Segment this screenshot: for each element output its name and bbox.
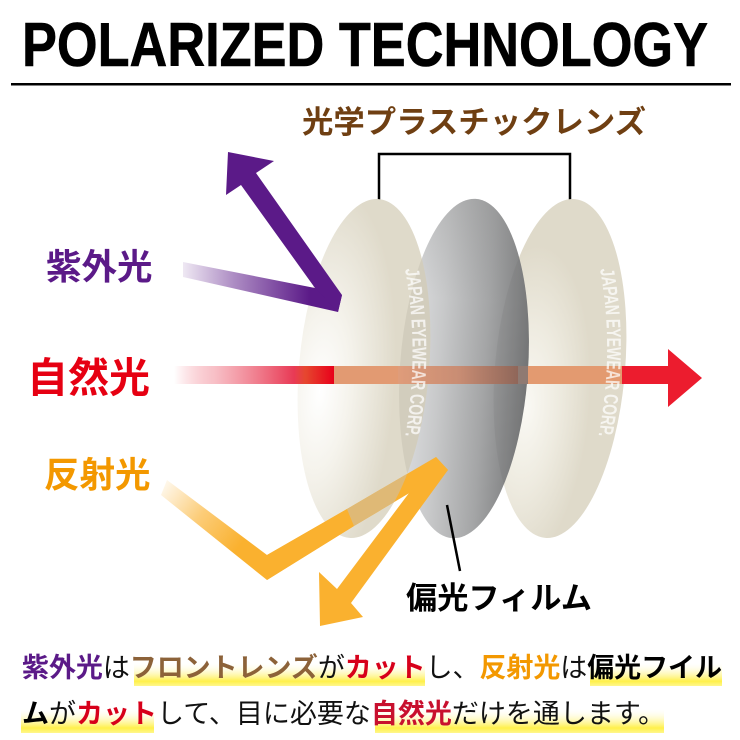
lens stack <box>298 198 626 538</box>
highlights <box>21 662 722 733</box>
arrow: ultraviolet purple <box>183 152 342 312</box>
heading: optical plastic lens: 光学プラスチックレンズ <box>302 105 646 140</box>
arrow: reflected orange <box>161 457 448 626</box>
watermark: rear lens: JAPAN EYEWEAR CORP. <box>598 269 621 436</box>
bracket: lens pair <box>379 154 570 209</box>
lens: front lens overlap shade <box>399 259 430 473</box>
watermark: front lens: JAPAN EYEWEAR CORP. <box>405 269 426 436</box>
pale overlap inside front lens <box>347 474 407 526</box>
leader line: film <box>447 505 460 571</box>
label: natural light: 自然光 <box>27 355 150 401</box>
lens: rear lens overlap shade <box>480 193 640 544</box>
caption line 1: 紫外光はフロントレンズがカットし、反射光は偏光フイル <box>22 652 722 683</box>
lens: film top shade <box>388 194 540 543</box>
lens: polarizing film <box>388 194 540 543</box>
lens: rear plastic lens <box>480 193 640 544</box>
arrow: natural light red <box>174 349 702 407</box>
label: ultraviolet: 紫外光 <box>46 247 153 287</box>
label: reflected light: 反射光 <box>44 455 151 495</box>
caption <box>22 652 722 729</box>
lens: front plastic lens <box>284 193 444 544</box>
label: polarizing film: 偏光フィルム <box>406 581 592 616</box>
caption line 2: ムがカットして、目に必要な自然光だけを通します。 <box>22 699 665 729</box>
